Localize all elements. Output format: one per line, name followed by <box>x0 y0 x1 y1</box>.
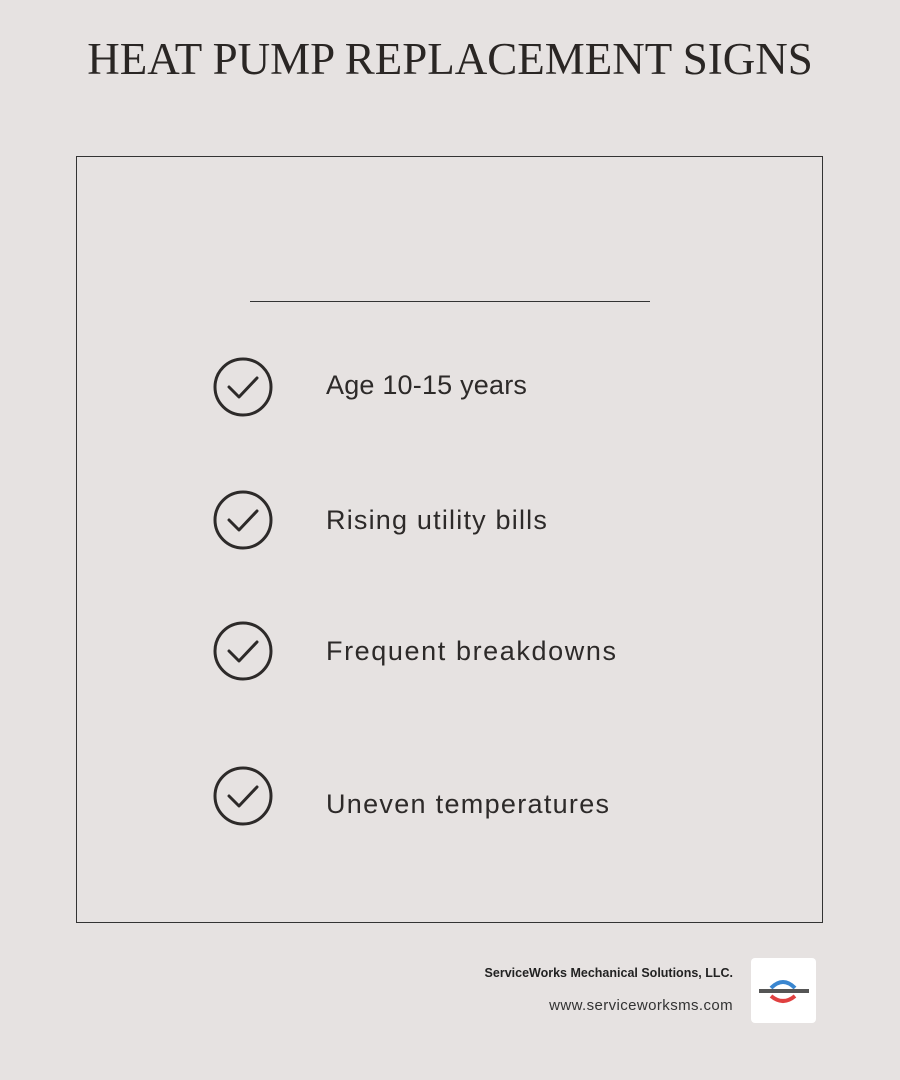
logo <box>751 958 816 1023</box>
item: breakdowns <box>214 622 618 680</box>
item: temperatures <box>214 766 610 826</box>
icon: check <box>214 766 272 826</box>
item: age: Age 10-15 years <box>326 370 527 400</box>
item: age <box>214 358 527 416</box>
panel: signs <box>76 156 823 923</box>
divider line <box>250 301 650 302</box>
footer company name: ServiceWorks Mechanical Solutions, LLC. <box>485 966 733 980</box>
item: bills <box>214 490 548 550</box>
item: temperatures: Uneven temperatures <box>326 789 610 819</box>
icon: check <box>214 622 272 680</box>
footer url: www.serviceworksms.com <box>549 997 733 1014</box>
item: breakdowns: Frequent breakdowns <box>326 636 618 666</box>
icon: check <box>214 490 272 550</box>
item: bills: Rising utility bills <box>326 505 548 535</box>
title: HEAT PUMP REPLACEMENT SIGNS <box>87 34 813 84</box>
icon: check <box>214 358 272 416</box>
